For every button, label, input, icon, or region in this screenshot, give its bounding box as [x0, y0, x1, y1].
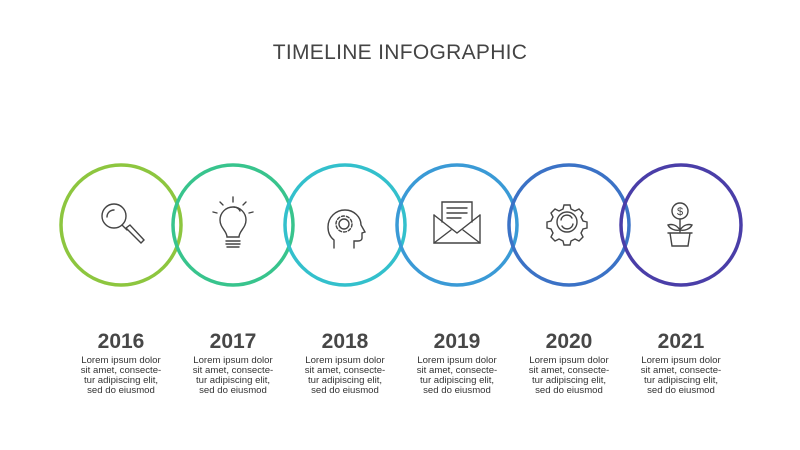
circle 2021 [621, 165, 741, 285]
item 2018: sit amet, consecte- [305, 365, 385, 376]
item 2016: sit amet, consecte- [81, 365, 161, 376]
icon: plant with coin [668, 203, 692, 246]
item 2016: tur adipiscing elit, [84, 375, 158, 386]
circle 2018 [285, 165, 405, 285]
icon: magnifier [102, 204, 144, 243]
item 2021: 2021 [658, 330, 704, 353]
circle 2020 [509, 165, 629, 285]
item 2021: sit amet, consecte- [641, 365, 721, 376]
item 2017: 2017 [210, 330, 256, 353]
icon: gear [547, 205, 587, 245]
item 2017: sed do eiusmod [199, 385, 267, 396]
item 2019: sit amet, consecte- [417, 365, 497, 376]
item 2020: sit amet, consecte- [529, 365, 609, 376]
item 2018: sed do eiusmod [311, 385, 379, 396]
item 2020: Lorem ipsum dolor [529, 355, 609, 366]
item 2016: sed do eiusmod [87, 385, 155, 396]
item 2018: tur adipiscing elit, [308, 375, 382, 386]
item 2018: 2018 [322, 330, 368, 353]
item 2021 [641, 330, 721, 396]
item 2019: tur adipiscing elit, [420, 375, 494, 386]
circle 2016 [61, 165, 181, 285]
item 2017: sit amet, consecte- [193, 365, 273, 376]
item 2021: tur adipiscing elit, [644, 375, 718, 386]
item 2016: 2016 [98, 330, 144, 353]
circle 2017 [173, 165, 293, 285]
title: TIMELINE INFOGRAPHIC [273, 41, 527, 64]
item 2017: tur adipiscing elit, [196, 375, 270, 386]
circle 2019 [397, 165, 517, 285]
item 2019: Lorem ipsum dolor [417, 355, 497, 366]
item 2020 [529, 330, 609, 396]
icon: plant with coin: $ [677, 206, 683, 218]
item 2016: Lorem ipsum dolor [81, 355, 161, 366]
icon: light bulb [213, 197, 253, 247]
icon: head with gear [328, 210, 365, 248]
item 2017 [193, 330, 273, 396]
item 2020: sed do eiusmod [535, 385, 603, 396]
item 2018: Lorem ipsum dolor [305, 355, 385, 366]
item 2021: sed do eiusmod [647, 385, 715, 396]
item 2020: tur adipiscing elit, [532, 375, 606, 386]
item 2019 [417, 330, 497, 396]
item 2016 [81, 330, 161, 396]
item 2017: Lorem ipsum dolor [193, 355, 273, 366]
item 2020: 2020 [546, 330, 592, 353]
item 2018 [305, 330, 385, 396]
item 2019: 2019 [434, 330, 480, 353]
item 2019: sed do eiusmod [423, 385, 491, 396]
item 2021: Lorem ipsum dolor [641, 355, 721, 366]
icon: envelope [434, 202, 480, 243]
